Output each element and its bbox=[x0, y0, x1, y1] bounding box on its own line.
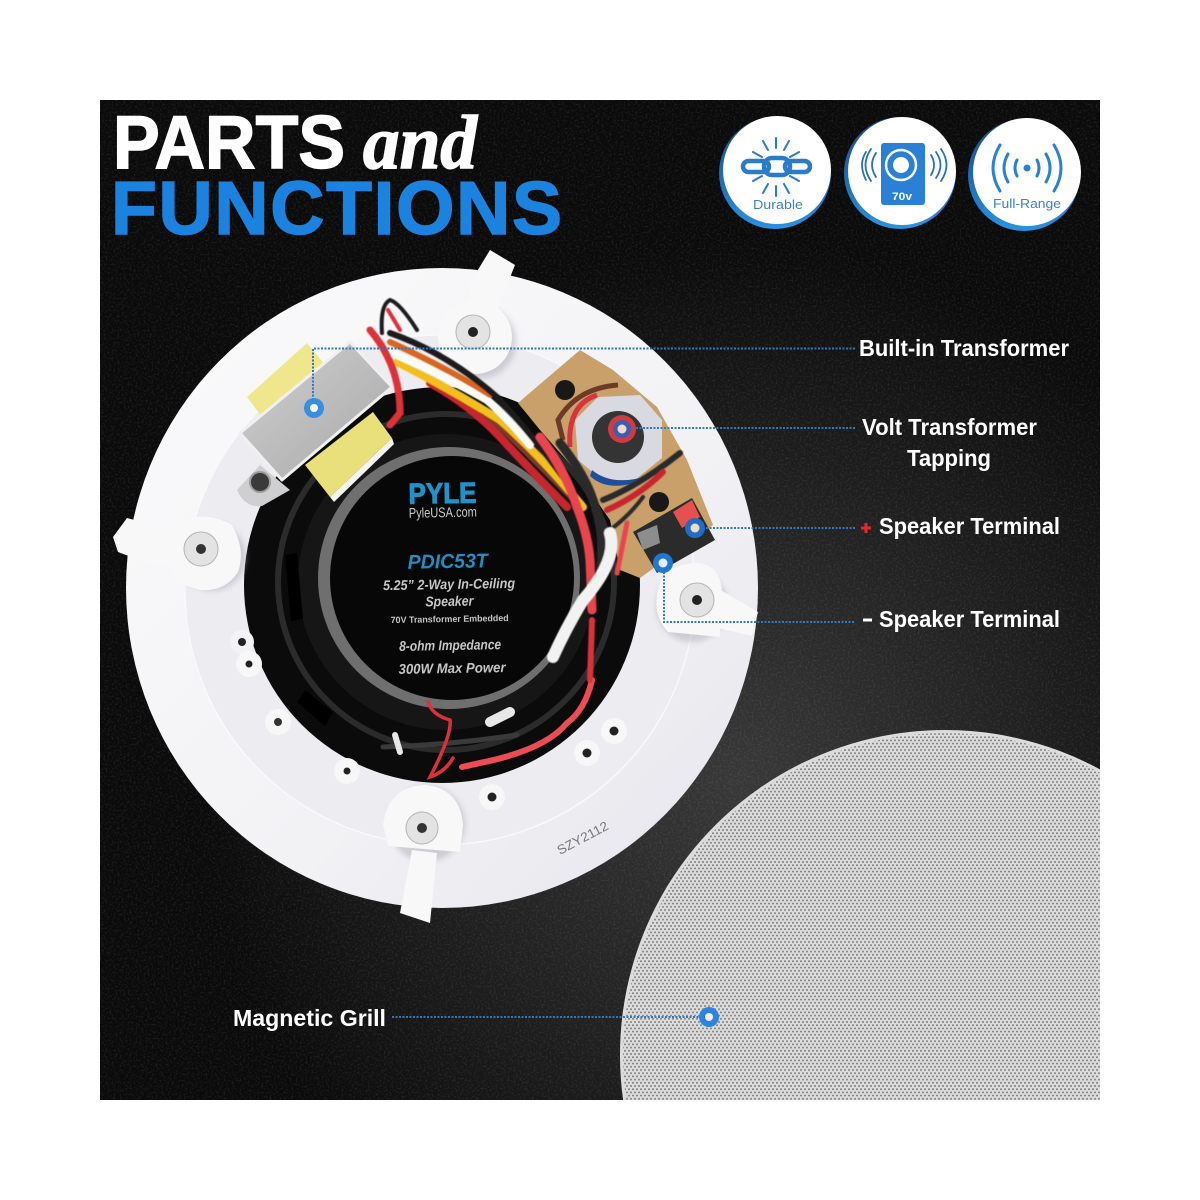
circuit board bbox=[518, 350, 713, 578]
title bbox=[111, 100, 562, 250]
speaker label: 8-ohm Impedance bbox=[399, 636, 501, 654]
callout: volt transformer tapping: Volt Transformer bbox=[862, 414, 1037, 440]
callout: volt transformer tapping bbox=[613, 414, 1037, 471]
transformer bbox=[237, 342, 394, 506]
badge: 70v speaker bbox=[844, 117, 956, 229]
badge: durable bbox=[719, 116, 831, 229]
icon: chain link bbox=[743, 138, 810, 196]
clamp screws bbox=[184, 315, 714, 844]
title: and bbox=[363, 101, 478, 185]
callout: plus speaker terminal: Speaker Terminal bbox=[879, 513, 1060, 539]
voltage tap selector bbox=[575, 395, 662, 486]
callout: volt transformer tapping: Tapping bbox=[907, 445, 991, 471]
speaker label bbox=[330, 456, 574, 700]
small mounting posts bbox=[230, 630, 627, 810]
callout: built-in transformer bbox=[304, 335, 1069, 418]
callout: magnetic grill: Magnetic Grill bbox=[233, 1005, 386, 1031]
speaker label: 5.25” 2-Way In-Ceiling bbox=[383, 575, 516, 593]
black speaker basket bbox=[244, 387, 640, 783]
callout: magnetic grill bbox=[233, 1005, 719, 1031]
callout: minus speaker terminal bbox=[653, 553, 1060, 632]
title: FUNCTIONS bbox=[111, 166, 562, 250]
icon: speaker box: 70v bbox=[892, 191, 913, 203]
callout: minus speaker terminal: Speaker Terminal bbox=[879, 606, 1060, 632]
clamp shadows bbox=[178, 305, 728, 862]
badge: durable: Durable bbox=[753, 198, 803, 212]
badge: full-range bbox=[968, 118, 1081, 231]
icon: sound waves bbox=[993, 145, 1061, 191]
main wire bundle bbox=[370, 300, 680, 680]
title: PARTS bbox=[113, 100, 345, 184]
flange ring bbox=[126, 268, 758, 908]
speaker label: 70V Transformer Embedded bbox=[391, 613, 509, 625]
speaker label: 300W Max Power bbox=[398, 659, 507, 677]
callout: built-in transformer: Built-in Transformer bbox=[859, 335, 1069, 361]
speaker label: PYLE bbox=[408, 478, 477, 511]
bottom wiring bbox=[383, 680, 592, 777]
panel: dark textured background bbox=[100, 100, 1100, 1100]
speaker terminal bbox=[633, 498, 715, 573]
speaker label: Speaker bbox=[425, 593, 475, 609]
mold mark: SZY2112 bbox=[554, 818, 611, 858]
mounting clamps bbox=[113, 250, 758, 923]
callout: plus speaker terminal bbox=[685, 513, 1060, 539]
magnetic grill bbox=[620, 730, 1100, 1100]
badge: full-range: Full-Range bbox=[993, 197, 1061, 211]
speaker label: PyleUSA.com bbox=[409, 504, 477, 521]
speaker label: PDIC53T bbox=[408, 550, 490, 574]
speaker back assembly bbox=[113, 250, 758, 923]
